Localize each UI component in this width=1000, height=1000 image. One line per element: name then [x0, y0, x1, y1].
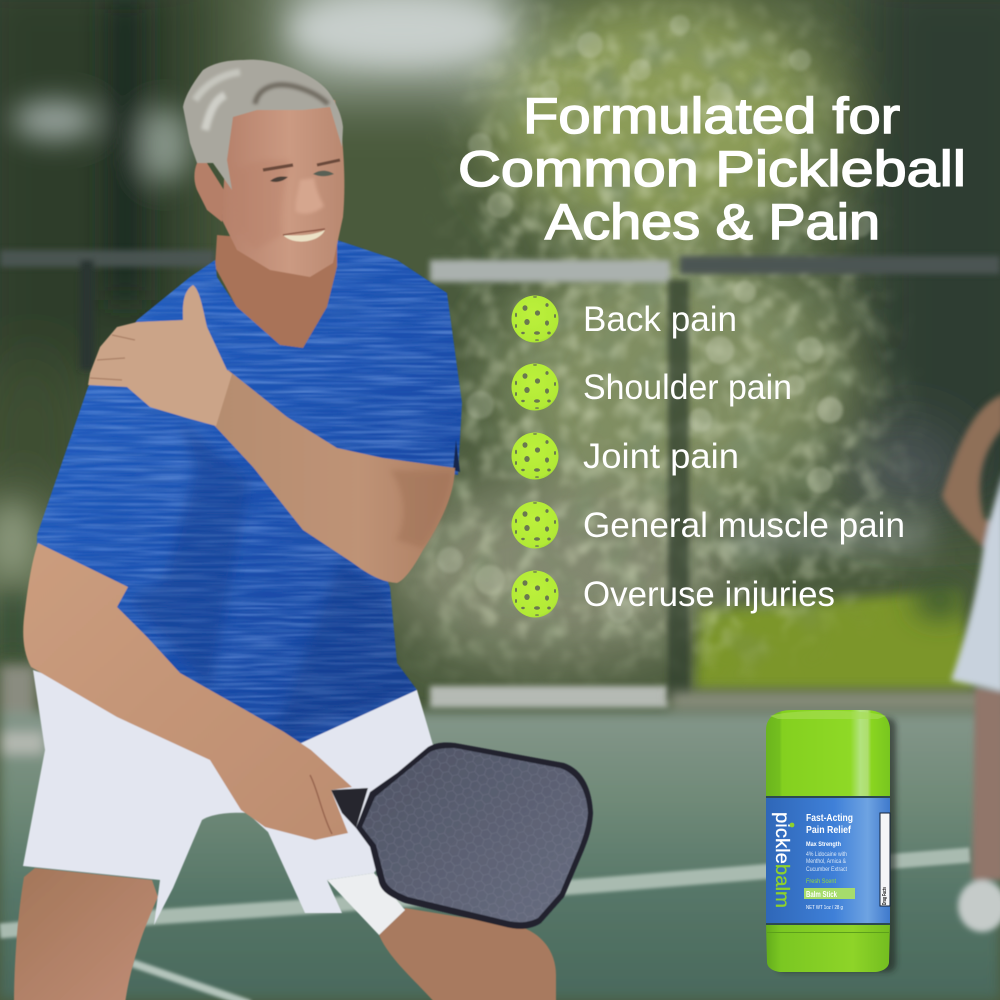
- grey hair: [183, 60, 343, 190]
- blue label: Fresh Scent: [806, 878, 836, 885]
- blue label: NET WT 1oz / 28 g: [806, 905, 843, 911]
- item: shoulder pain: Shoulder pain: [583, 368, 792, 407]
- knee sleeve: [327, 873, 405, 935]
- head: [222, 100, 344, 277]
- blue label: Max Strength: [806, 841, 841, 848]
- ear: [194, 163, 224, 222]
- product: balm stick: [766, 710, 896, 972]
- blue label: Menthol, Arnica &: [806, 859, 846, 865]
- blue label: Cucumber Extract: [806, 867, 847, 873]
- neck: [215, 235, 337, 348]
- item: shoulder pain: [512, 364, 792, 410]
- title: Common Pickleball: [458, 141, 966, 197]
- item: overuse injuries: [512, 570, 835, 618]
- blue label: Balm Stick: [806, 890, 837, 899]
- blue label: 4% Lidocaine with: [806, 852, 847, 858]
- blue label: Drug Facts: [882, 887, 888, 905]
- green cap: [766, 710, 890, 797]
- item: joint pain: [512, 432, 739, 480]
- item: back pain: Back pain: [583, 300, 737, 339]
- item: general muscle pain: General muscle pain: [583, 506, 905, 545]
- green base: [766, 924, 890, 972]
- pain list: [512, 296, 905, 618]
- front leg: [14, 868, 158, 1000]
- pickleball paddle: [331, 742, 593, 929]
- blue label: pickle balm: [771, 812, 792, 908]
- title: [458, 88, 966, 250]
- background player: [942, 394, 1000, 932]
- lower arm and gripping hand: [23, 543, 352, 840]
- white shorts: [23, 670, 433, 925]
- item: back pain: [512, 296, 737, 342]
- blue label: Fast-Acting: [806, 813, 853, 824]
- blue label: Pain Relief: [806, 825, 852, 836]
- blue label: [766, 796, 890, 925]
- title: Aches & Pain: [545, 194, 880, 250]
- item: joint pain: Joint pain: [583, 437, 739, 476]
- blue shirt: [30, 230, 470, 750]
- lawn: [695, 590, 975, 690]
- man with paddle: [14, 60, 593, 1000]
- rear leg: [379, 908, 556, 1000]
- forearm and elbow: [213, 370, 455, 583]
- hand on shoulder: [88, 285, 232, 426]
- title: Formulated for: [523, 88, 900, 144]
- item: general muscle pain: [512, 502, 905, 548]
- item: overuse injuries: Overuse injuries: [583, 575, 835, 614]
